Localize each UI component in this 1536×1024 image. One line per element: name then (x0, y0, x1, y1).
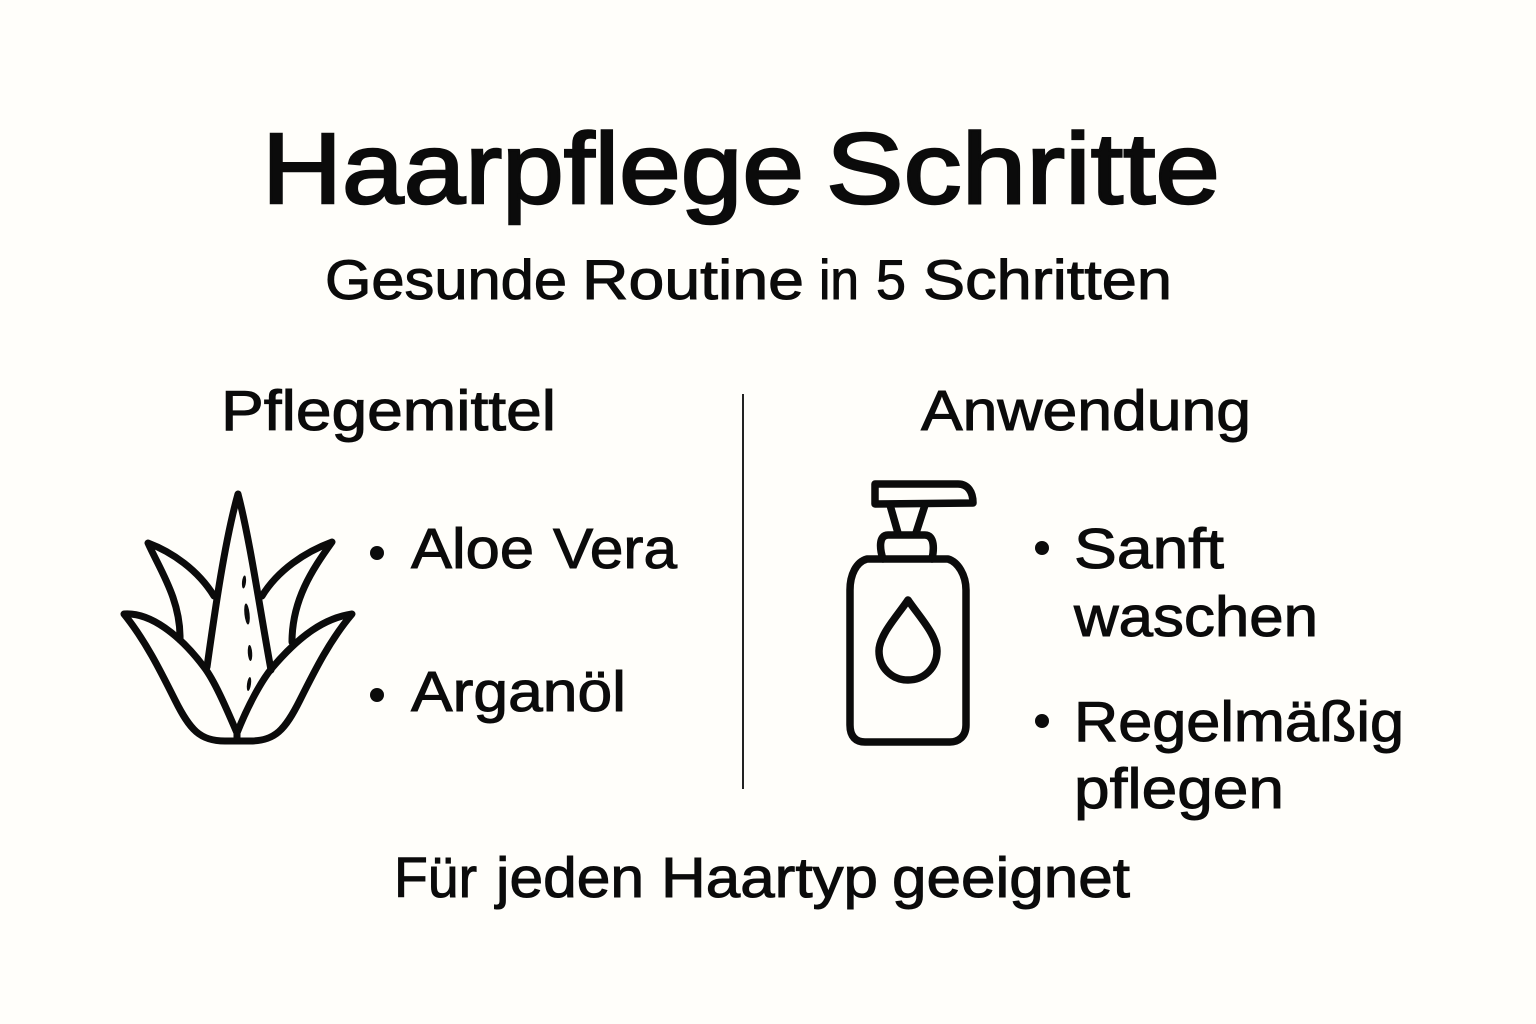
title (262, 113, 1220, 225)
icon: aloe vera plant (124, 494, 352, 741)
subtitle: Gesunde (325, 248, 567, 311)
subtitle: in (819, 248, 859, 311)
footer note: Haartyp (661, 846, 878, 910)
footer note (394, 846, 1130, 910)
bullet: Sanft waschen: Sanft (1074, 517, 1224, 581)
icon: pump bottle with drop (850, 484, 973, 742)
footer note: Für (394, 846, 477, 910)
bullet: Sanft waschen (1035, 517, 1318, 649)
bullet: Arganöl: Arganöl (411, 660, 626, 724)
footer note: jeden (494, 846, 644, 910)
title: Schritte (826, 113, 1220, 225)
panel: Anwendung (850, 379, 1404, 821)
bullet: Regelmäßig pflegen: Regelmäßig (1074, 690, 1404, 754)
bullet: Aloe Vera (370, 517, 677, 581)
subtitle: Schritten (923, 248, 1172, 311)
title: Haarpflege (262, 113, 804, 225)
bullet: Regelmäßig pflegen (1035, 690, 1404, 821)
subtitle: Routine (582, 248, 804, 311)
subtitle: 5 (876, 248, 906, 311)
subtitle (325, 248, 1172, 311)
bullet: Regelmäßig pflegen: pflegen (1074, 757, 1284, 821)
divider (742, 394, 744, 789)
bullet: Aloe Vera: Aloe (411, 517, 534, 581)
bullet: Sanft waschen: waschen (1073, 585, 1318, 649)
footer note: geeignet (892, 846, 1130, 910)
heading: Pflegemittel: Pflegemittel (221, 379, 556, 443)
icon: aloe leaf dashes (241, 575, 253, 691)
bullet: Aloe Vera: Vera (553, 517, 677, 581)
panel: Pflegemittel (124, 379, 677, 741)
heading: Anwendung: Anwendung (921, 379, 1251, 443)
